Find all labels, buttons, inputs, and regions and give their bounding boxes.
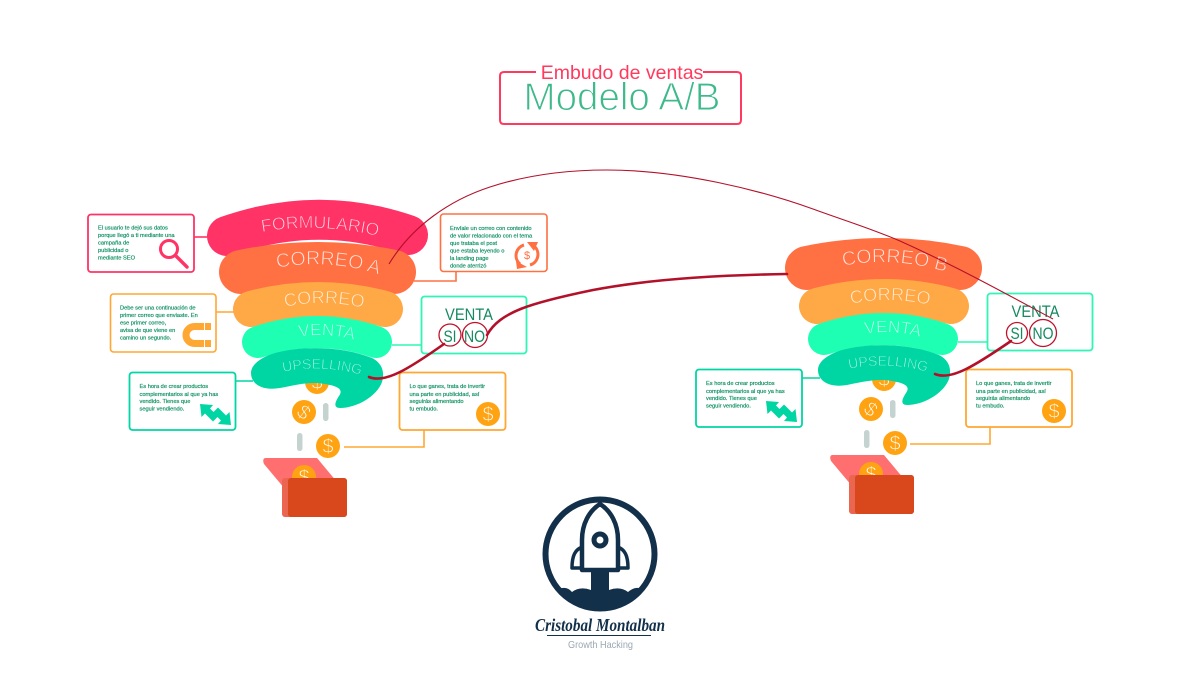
- panel: Reinvest note B: seguirás alimentando: [976, 396, 1030, 402]
- panel: Venta decision B: NO: [1032, 324, 1054, 343]
- band: Venta: VENTA: [298, 324, 354, 340]
- panel: Reinvest note B: [910, 370, 1072, 444]
- arrow: Correo A to VENTA B: [389, 170, 1053, 319]
- panel: Venta decision A: SI: [444, 327, 456, 346]
- panel: Venta decision A: VENTA: [445, 305, 494, 324]
- arrow: Upselling A to SI: [369, 344, 444, 379]
- icon: coin B: [1042, 399, 1066, 423]
- icon: coin: [476, 402, 500, 426]
- panel: Upselling note B: seguir vendiendo.: [706, 404, 751, 410]
- band: Venta: [242, 316, 392, 358]
- panel: Reinvest note: una parte en publicidad, así: [410, 392, 480, 398]
- title: Embudo de ventas: Embudo de ventas: [541, 62, 704, 84]
- panel: Correo note: primer correo que enviaste. En: [120, 313, 198, 319]
- panel: Upselling note B: Es hora de crear productos: [706, 381, 775, 387]
- band: Correo: [233, 282, 403, 327]
- icon: magnet: [186, 323, 211, 347]
- panel: Formulario note: campaña de: [98, 241, 129, 247]
- band: Upselling (B): [818, 345, 950, 405]
- logo: [535, 500, 665, 651]
- funnel A: [207, 200, 428, 517]
- funnel B: [785, 238, 982, 514]
- panel: Correo A note: de valor relacionado con el tema: [450, 234, 533, 240]
- panel: Correo note: Debe ser una continuación de: [120, 305, 196, 311]
- panel: Upselling note: vendido. Tienes que: [140, 399, 190, 405]
- icon: arrows: [200, 404, 231, 425]
- panel: Reinvest note: seguirás alimentando: [410, 399, 464, 405]
- panel: Formulario note: publicidad o: [98, 248, 128, 254]
- arrow: NO A to Correo B: [487, 274, 787, 335]
- icon: magnifier: [160, 240, 187, 267]
- logo tagline: Growth Hacking: [568, 639, 633, 651]
- panel: Formulario note: [88, 214, 208, 272]
- icon: rocket badge: [546, 500, 654, 610]
- panel: Correo A note: donde aterrizó: [450, 264, 486, 270]
- panel: Upselling note: [130, 372, 253, 430]
- band: Correo A: [219, 242, 416, 294]
- coins falling B: $: [859, 398, 882, 422]
- panel: Correo note: camino un segundo.: [120, 335, 172, 341]
- coins falling A: $: [311, 372, 323, 394]
- logo name: Cristobal Montalban: [535, 615, 665, 635]
- coins falling A: $: [322, 436, 334, 458]
- panel: Upselling note: complementarios al que ya has: [140, 392, 218, 398]
- coins falling B: $: [889, 433, 901, 455]
- band: Venta (B): VENTA: [864, 321, 920, 336]
- band: Correo B: CORREO B: [843, 249, 946, 271]
- panel: Correo note: [110, 294, 234, 352]
- band: Correo (B): CORREO: [851, 288, 930, 304]
- coins falling B: $: [878, 369, 890, 391]
- panel: Correo note: ese primer correo,: [120, 320, 167, 326]
- coins falling A: [292, 370, 340, 458]
- panel: Upselling note B: complementarios al que ya has: [706, 389, 785, 395]
- panel: Venta decision B: [958, 294, 1092, 350]
- chest B: $: [865, 464, 877, 486]
- icon: arrows B: [766, 401, 797, 422]
- panel: Correo A note: que trataba el post: [450, 241, 498, 247]
- panel: Correo note: avisa de que viene en: [120, 328, 175, 334]
- chest B: [830, 455, 914, 514]
- band: Upselling (B): UPSELLING: [848, 356, 927, 370]
- panel: Correo A note: la landing page: [450, 256, 489, 262]
- chest A: $: [298, 467, 310, 489]
- band: Formulario: [207, 200, 428, 256]
- arrow: Upselling B to SI: [935, 341, 1011, 376]
- panel: Upselling note: Es hora de crear productos: [140, 384, 208, 390]
- band: Formulario: FORMULARIO: [262, 216, 378, 235]
- panel: Venta decision B: SI: [1010, 324, 1024, 343]
- panel: Correo A note: [414, 214, 547, 281]
- panel: Upselling note B: vendido. Tienes que: [706, 396, 757, 402]
- panel: Reinvest note B: una parte en publicidad, así: [976, 389, 1046, 395]
- band: Correo: CORREO: [285, 291, 364, 306]
- coins falling A: $: [292, 401, 315, 425]
- band: Upselling: UPSELLING: [282, 359, 361, 374]
- panel: Reinvest note B: tu embudo.: [976, 404, 1005, 410]
- title box: [500, 62, 741, 124]
- panel: Venta decision A: [392, 296, 526, 354]
- band: Correo A: CORREO A: [277, 251, 378, 274]
- panel: Formulario note: El usuario te dejó sus datos: [98, 226, 168, 232]
- band: Venta (B): [808, 313, 958, 355]
- panel: Venta decision B: VENTA: [1012, 302, 1060, 321]
- panel: Formulario note: porque llegó a ti mediante una: [98, 233, 175, 239]
- icon: coin: $: [482, 404, 494, 426]
- title: Modelo A/B: Modelo A/B: [524, 76, 720, 119]
- band: Correo B: [785, 238, 982, 290]
- chest A: [263, 458, 347, 517]
- band: Upselling: [251, 348, 384, 408]
- panel: Upselling note: seguir vendiendo.: [140, 407, 185, 413]
- panel: Correo A note: Envíale un correo con contenido: [450, 226, 532, 232]
- panel: Venta decision A: NO: [464, 327, 485, 346]
- panel: Correo A note: que estaba leyendo o: [450, 248, 504, 254]
- panel: Upselling note B: [696, 370, 820, 427]
- panel: Reinvest note: [344, 372, 506, 447]
- panel: Reinvest note: tu embudo.: [410, 407, 438, 413]
- coins falling B: [859, 367, 907, 455]
- panel: Formulario note: mediante SEO: [98, 256, 136, 262]
- panel: Reinvest note B: Lo que ganes, trata de invertir: [976, 381, 1052, 387]
- icon: refresh dollar: $: [524, 250, 530, 262]
- panel: Reinvest note: Lo que ganes, trata de invertir: [410, 384, 485, 390]
- icon: coin B: $: [1048, 401, 1060, 423]
- band: Correo (B): [799, 279, 969, 324]
